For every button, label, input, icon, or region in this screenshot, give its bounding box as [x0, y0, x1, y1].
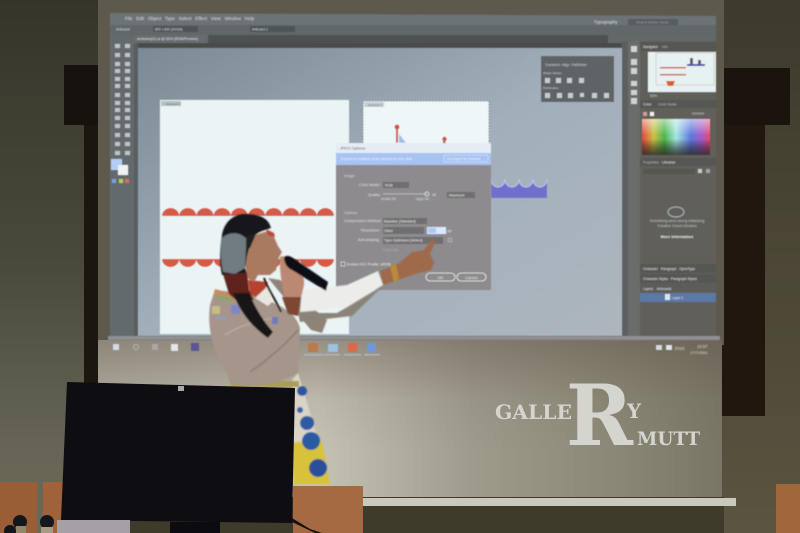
menu bar: Search Adobe Stock [636, 20, 669, 24]
control bar: Artboard 1 [252, 28, 268, 32]
projected icons on blouse [212, 305, 278, 324]
projected Windows taskbar: ENG [675, 346, 685, 351]
JPEG options dialog: RGB [385, 184, 393, 188]
pointing arm shadow [298, 286, 383, 322]
JPEG options dialog: Baseline (Standard) [384, 220, 416, 224]
watermark: Gallery RMUTT: R [566, 366, 634, 465]
headband [266, 229, 275, 237]
blouse [209, 289, 300, 385]
microphone [284, 256, 328, 291]
dark wooden panel: left [64, 65, 100, 383]
computer monitor [61, 382, 322, 533]
papers and bottles on desk [4, 515, 130, 533]
color panel: FFFFFF [692, 112, 704, 116]
navigator panel: Info [662, 45, 668, 49]
control bar [110, 25, 716, 35]
floating panel: transform / align / pathfinder: Transform Align Pathfinder [545, 63, 588, 67]
JPEG options dialog: larger file [416, 197, 429, 201]
character and layers panels: 1 Layer [641, 336, 651, 340]
JPEG options dialog: JPEG Options [340, 146, 365, 150]
JPEG options dialog: Quality: [368, 193, 381, 197]
color panel [640, 100, 716, 155]
JPEG options dialog: Maximum [449, 194, 465, 198]
toolbar [110, 35, 134, 340]
collar [248, 280, 268, 298]
JPEG options dialog: ppi [447, 229, 452, 233]
projection screen [98, 0, 724, 497]
menu bar: Typography [594, 20, 618, 24]
JPEG options dialog: Type Optimized (Hinted) [384, 238, 423, 242]
pointing hand [380, 238, 435, 285]
libraries panel: Something went wrong initializing [650, 219, 704, 223]
character and layers panels: Character Styles Paragraph Styles [643, 277, 697, 281]
color panel: Color Guide [658, 102, 677, 106]
menu bar: File Edit Object Type Select Effect View Window Help [125, 16, 255, 21]
side icon dock [622, 41, 640, 340]
control bar: 800 x 600 (SVGA) [155, 28, 183, 32]
JPEG options dialog: 10 [432, 193, 436, 197]
navigator panel [640, 42, 716, 98]
document tab [134, 35, 608, 43]
watermark: Gallery RMUTT: MUTT [637, 428, 700, 450]
screen bottom rail [363, 498, 736, 506]
hair [220, 214, 271, 275]
JPEG options dialog: Embed ICC Profile: sRGB [347, 262, 391, 266]
character and layers panels: Layer 1 [672, 296, 683, 300]
projected Windows taskbar: 15:57 [697, 344, 708, 349]
libraries panel: Creative Cloud Libraries [657, 224, 697, 228]
libraries panel: Properties [643, 160, 659, 164]
floating panel: transform / align / pathfinder: Pathfinders: [543, 86, 559, 90]
area below screen [99, 497, 724, 533]
floating panel: transform / align / pathfinder: Shape Modes: [543, 71, 563, 75]
libraries panel: More Information [661, 234, 694, 239]
libraries panel: Libraries [662, 160, 676, 164]
character and layers panels: Layers Artboards [643, 287, 672, 291]
projected Windows taskbar [108, 336, 720, 356]
table and wooden dividers [0, 482, 800, 533]
dark wooden panel: right [722, 68, 790, 416]
document tab: workshop01.ai @ 50% (RGB/Preview) [137, 37, 198, 41]
shadow strip behind sleeve [268, 278, 327, 333]
pointing sleeve [300, 271, 383, 312]
JPEG options dialog: Go Export for Screens [447, 157, 481, 161]
long hair [223, 273, 281, 338]
white neckline [255, 286, 272, 306]
menu bar [110, 13, 716, 25]
right panels [640, 41, 716, 340]
JPEG options dialog: Options [344, 211, 357, 215]
watermark: Gallery RMUTT [495, 366, 700, 465]
skirt [231, 373, 330, 484]
artboard 2 [363, 101, 489, 161]
watermark: Gallery RMUTT: Y [626, 399, 642, 423]
artboard 2: Artboard 2 [368, 103, 382, 107]
window frame [110, 13, 716, 340]
JPEG options dialog: Image [344, 174, 355, 178]
JPEG options dialog: Export in multiple scale factors in one click. [341, 157, 413, 161]
watermark: Gallery RMUTT: GALLE [495, 400, 572, 424]
ruler [134, 43, 622, 336]
JPEG options dialog: smaller file [381, 197, 396, 201]
control bar: Artboard [116, 28, 130, 32]
JPEG options dialog: Compression Method: [344, 219, 381, 223]
purple wave shape [491, 179, 547, 198]
navigator panel: 50% [650, 94, 657, 98]
raised hand with cuff [280, 256, 304, 316]
JPEG options dialog: Other [384, 229, 394, 233]
artboard 1: Artboard 1 [166, 102, 180, 106]
character and layers panels: Character Paragraph OpenType [643, 267, 695, 271]
JPEG options dialog: Color Model: [359, 183, 381, 187]
navigator panel: Navigator [643, 45, 659, 49]
artboard canvas [138, 48, 622, 336]
presenter [209, 214, 435, 484]
libraries panel [640, 158, 716, 239]
JPEG options dialog: OK [438, 275, 444, 280]
JPEG options dialog: Cancel [465, 275, 478, 280]
projected Windows taskbar: 17/7/2561 [690, 350, 709, 355]
artboard 1 [160, 100, 349, 334]
JPEG options dialog: Resolution: [361, 228, 380, 232]
color panel: Color [643, 102, 652, 106]
floating panel: transform / align / pathfinder [541, 56, 614, 102]
projected Illustrator window [110, 13, 716, 340]
JPEG options dialog [336, 143, 491, 290]
JPEG options dialog: Imagemap [382, 248, 398, 252]
character and layers panels [640, 264, 716, 340]
face [245, 231, 282, 282]
JPEG options dialog: Anti-aliasing: [358, 238, 380, 242]
